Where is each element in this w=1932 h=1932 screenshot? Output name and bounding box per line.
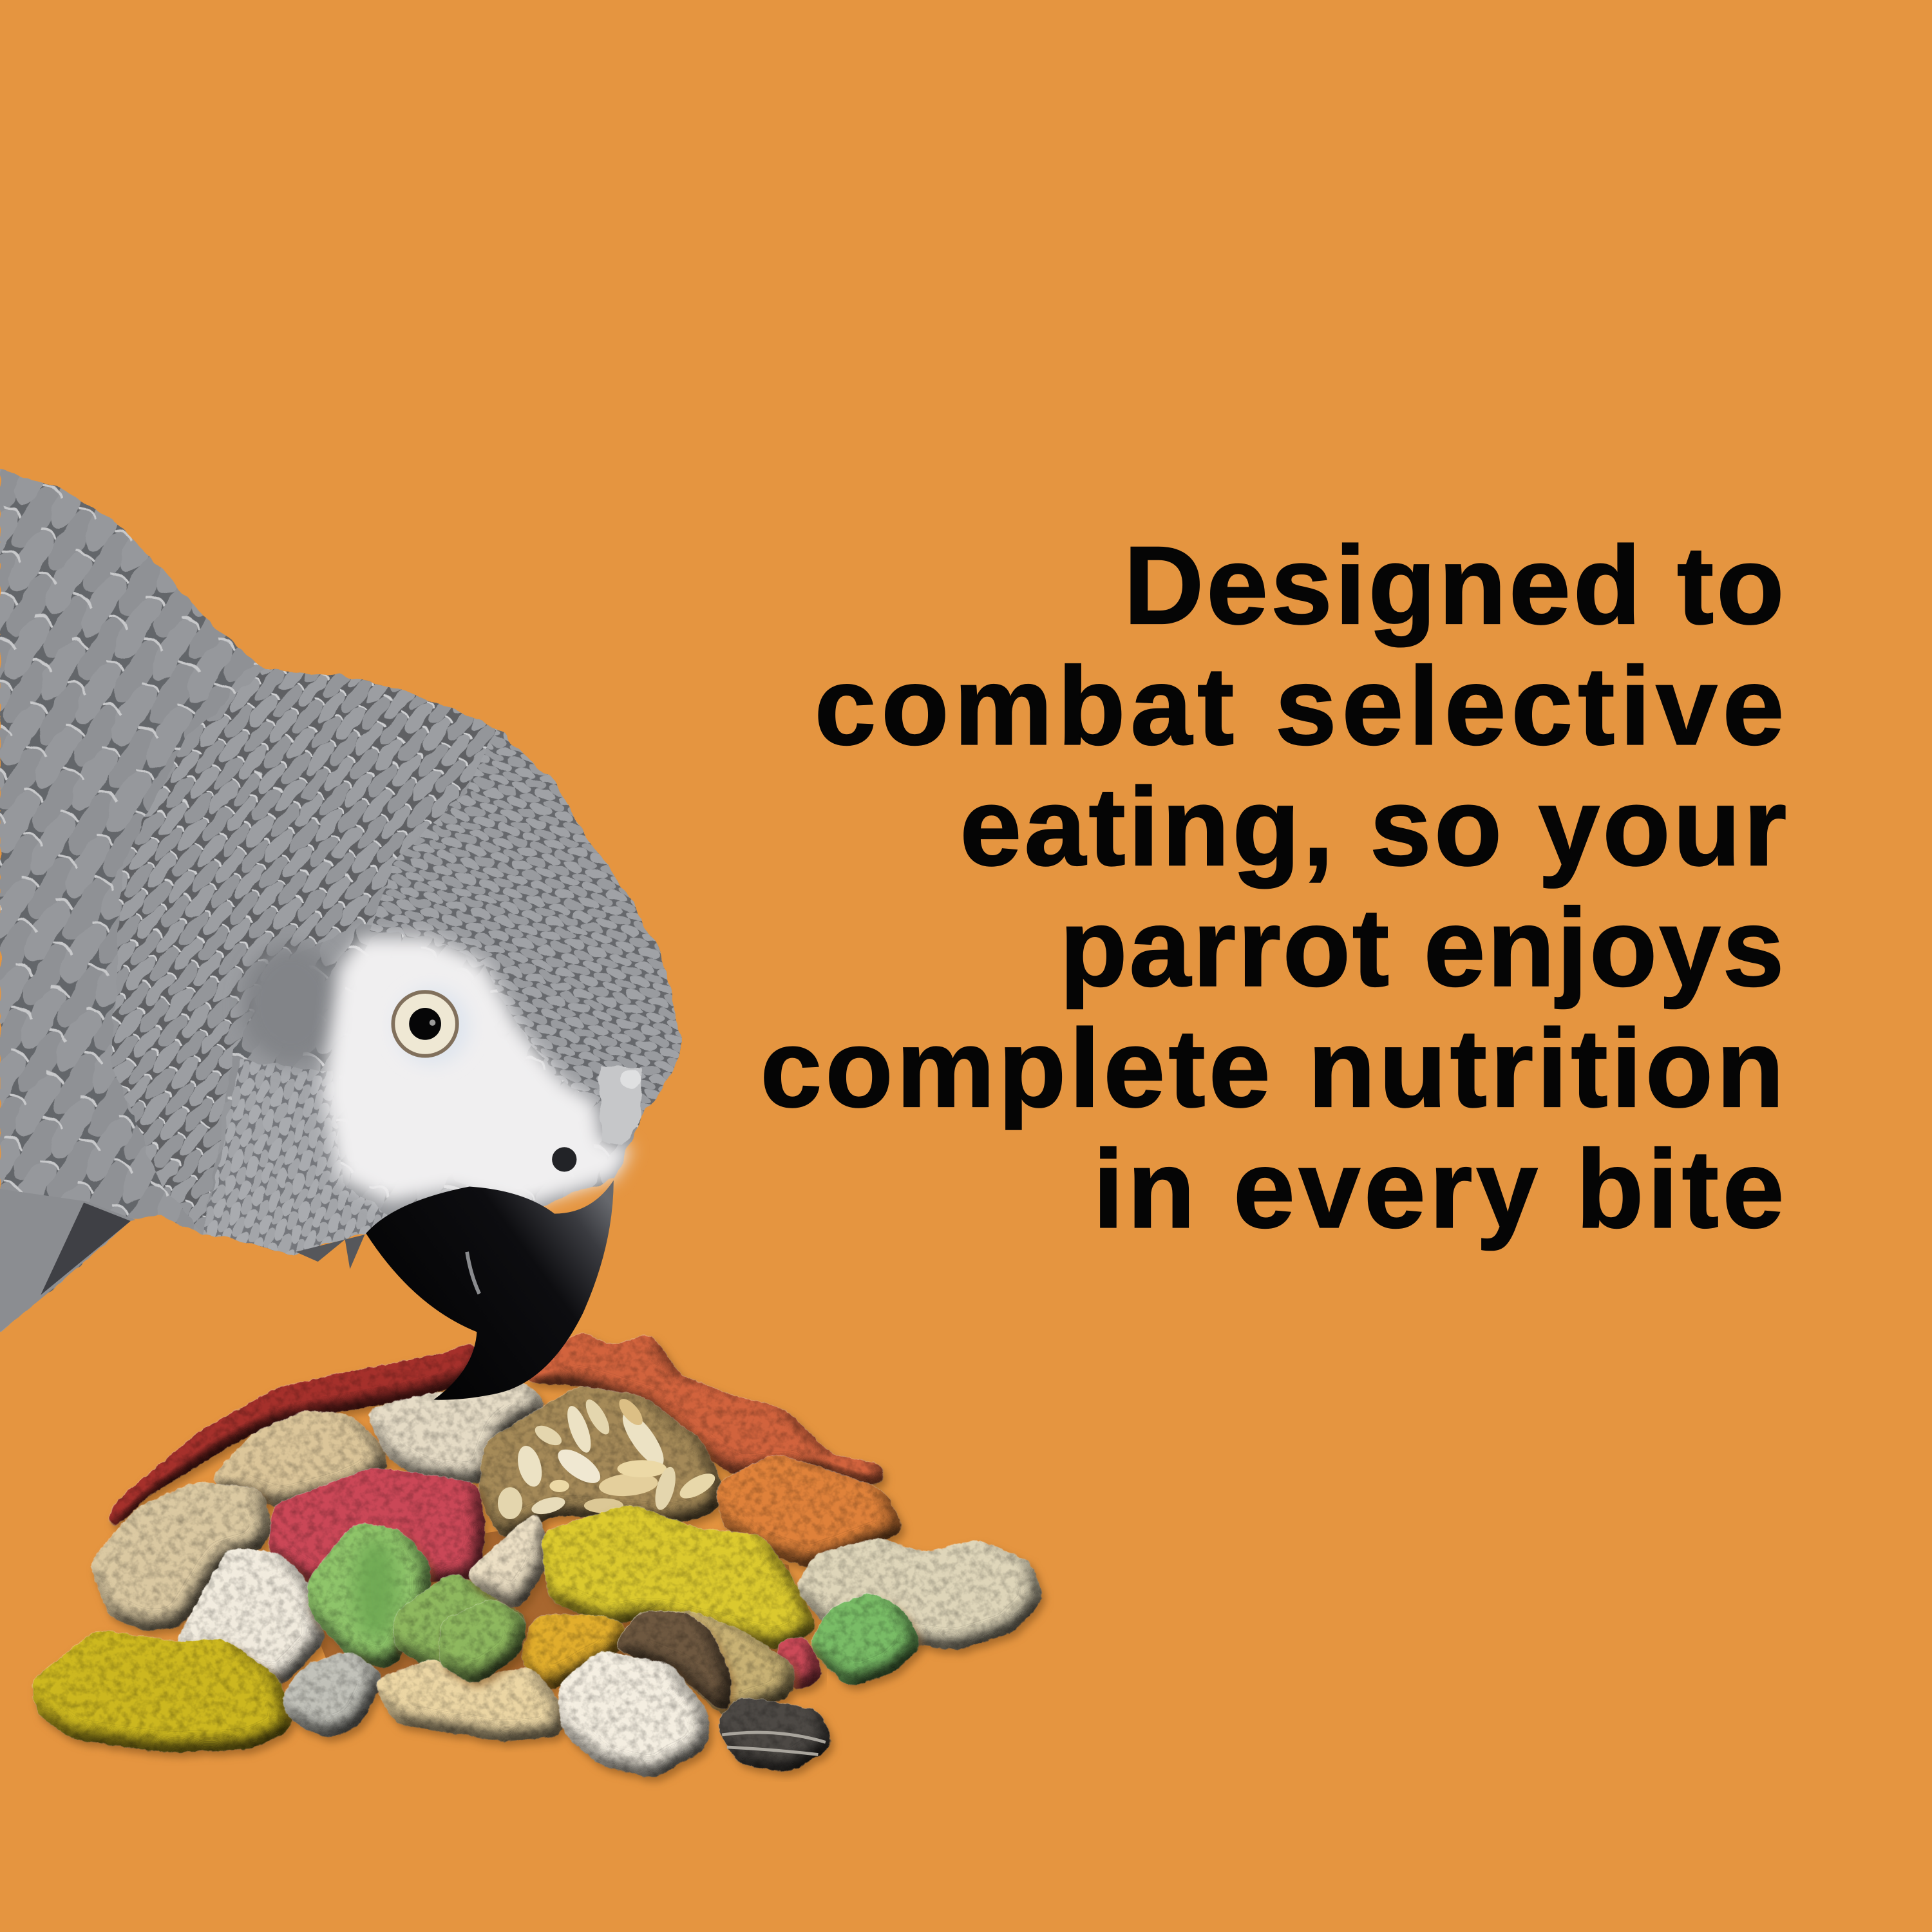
parrot beak highlight [467,1252,479,1294]
corn kernel [524,1619,625,1689]
green lump [398,1576,524,1681]
white rice ball [562,1655,705,1774]
headline text: combat selective [815,645,1784,768]
red strip left [108,1344,475,1529]
parrot neck feathers [111,669,683,1255]
headline text: complete nutrition [760,1007,1784,1130]
seed cluster [482,1390,719,1535]
cream shard [468,1514,545,1607]
red cube [272,1471,482,1582]
yellow puff [545,1508,813,1646]
tan flat nut [377,1662,562,1738]
parrot beak [366,1180,614,1400]
red strip right [524,1336,880,1484]
tan peanut top [213,1414,384,1504]
parrot eye [393,988,469,1065]
parrot nostril [552,1147,576,1172]
headline text: in every bite [1093,1128,1784,1251]
small green puff [813,1596,918,1683]
right peanut [800,1541,1040,1646]
parrot cheek feathers [204,1059,394,1255]
parrot body feathers [0,469,683,1332]
cream nut [370,1384,545,1480]
left peanut [93,1486,269,1627]
food gap underlay [290,1528,801,1688]
parrot crown feathers [370,728,683,1116]
clear seed [285,1655,381,1735]
small red piece [779,1639,820,1689]
parrot [0,469,683,1400]
green cup [310,1527,426,1665]
green lump front [444,1602,524,1681]
headline text [760,524,1786,1251]
headline text: parrot enjoys [1059,886,1784,1010]
orange puff [719,1457,901,1564]
parrot cere patch [599,1067,642,1146]
brown nut [618,1615,792,1714]
parrot white face [323,938,632,1209]
parrot plumage [0,469,683,1332]
striped sunflower seed [719,1700,829,1768]
parrot grey eye patch [242,945,340,1063]
yellow left puff [35,1634,290,1748]
food pile [35,1336,1040,1774]
headline text: Designed to [1124,524,1784,647]
parrot lower body [0,945,340,1332]
parrot throat tuft [296,1235,365,1269]
headline text: eating, so your [960,765,1786,889]
white lump [178,1551,321,1683]
